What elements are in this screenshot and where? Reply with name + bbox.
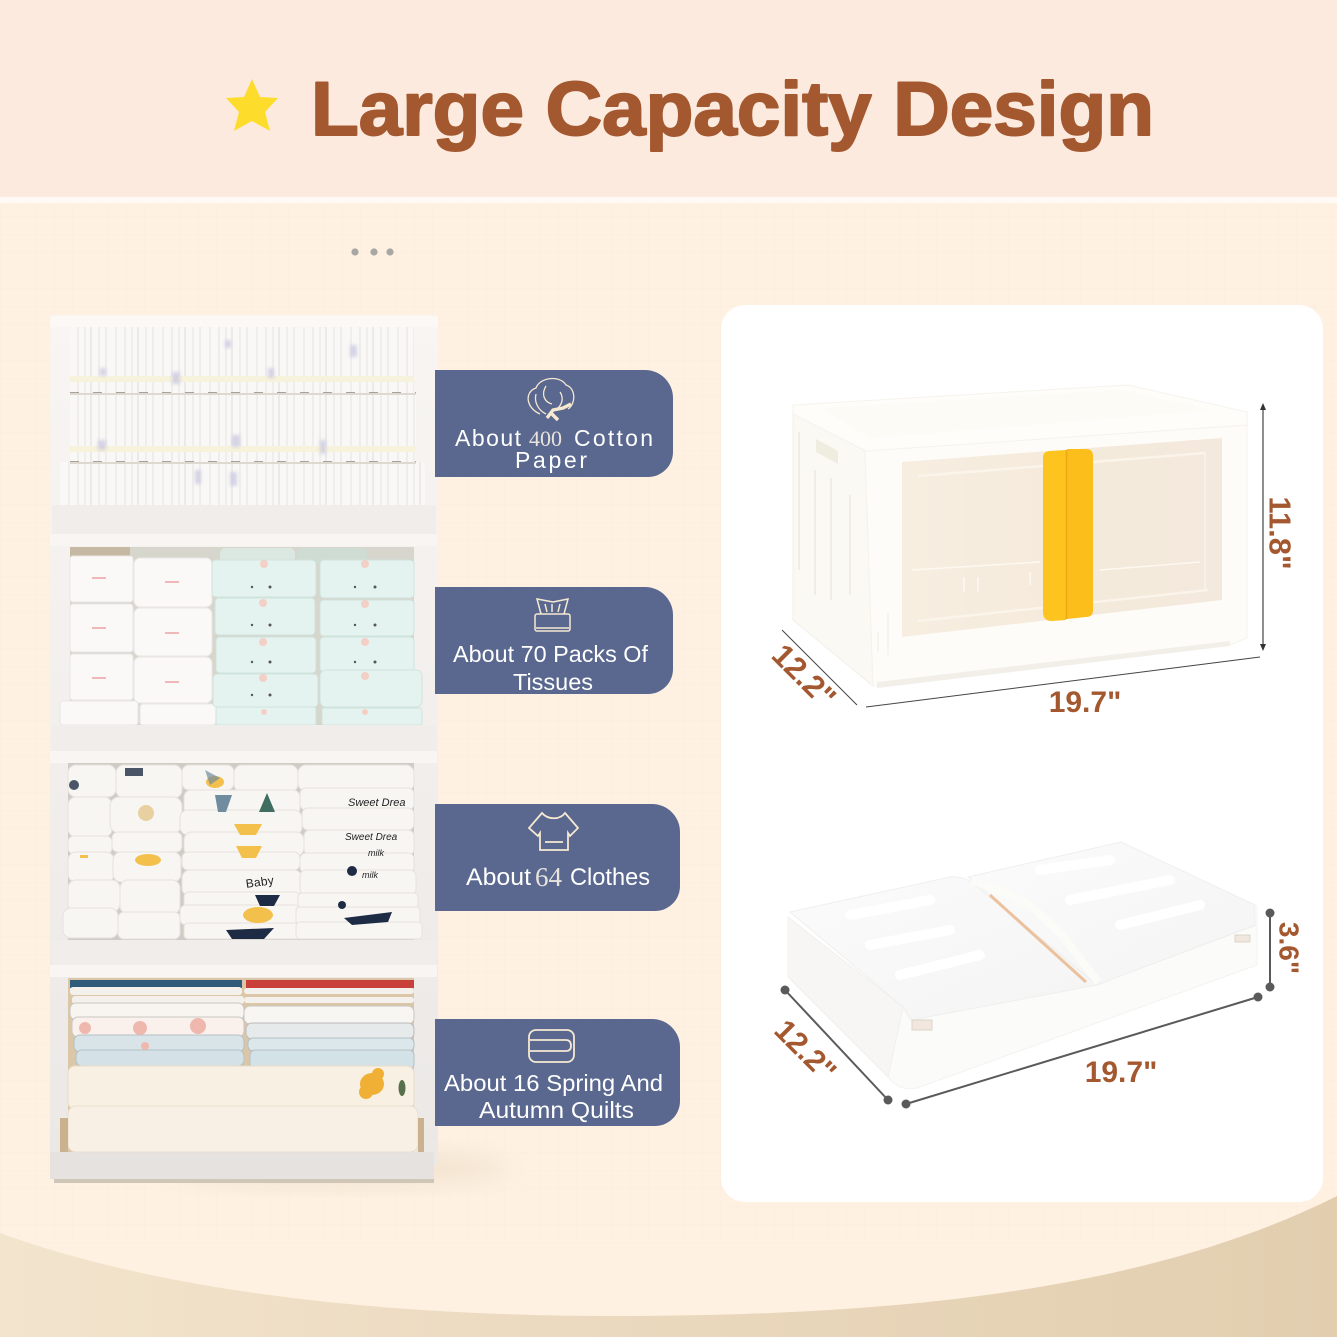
left lid panel — [790, 877, 1097, 1020]
front body — [888, 905, 1257, 1089]
compartment: diapers — [60, 327, 425, 506]
dimension: height 3.6 — [1266, 908, 1304, 992]
icon: folded quilt — [529, 1030, 574, 1062]
latches — [912, 935, 1250, 1030]
compartment: clothes: milk — [362, 870, 378, 880]
panel: stacked storage unit — [50, 315, 510, 1186]
dimension: width 19.7: 19.7" — [1049, 686, 1121, 719]
panel: cotton paper callout — [435, 370, 673, 477]
label: Autumn Quilts — [479, 1097, 634, 1123]
label: About — [455, 425, 522, 451]
lid — [793, 385, 1247, 451]
quilt bottom — [68, 1106, 418, 1152]
hinge seam — [990, 895, 1086, 982]
label: Tissues — [513, 669, 593, 695]
compartment: clothes — [63, 763, 422, 940]
unit body — [50, 315, 438, 1166]
compartment: tissues — [60, 547, 422, 725]
shelf lip 1 — [52, 505, 436, 534]
dimension: depth 12.2 — [768, 986, 892, 1104]
door window — [902, 438, 1222, 637]
left opening — [788, 917, 903, 1077]
icon: tissue box — [535, 599, 570, 631]
right lid panel — [968, 842, 1255, 985]
dimension: height 3.6: 3.6" — [1274, 922, 1304, 974]
dimension: width 19.7: 19.7" — [1085, 1056, 1157, 1089]
header band — [0, 0, 1337, 197]
compartment: clothes: Sweet Drea — [345, 832, 398, 843]
yellow handles — [1043, 450, 1066, 621]
label: About — [466, 864, 531, 891]
label: 400 — [529, 426, 562, 451]
compartment: quilts — [60, 978, 424, 1152]
title: Large Capacity Design — [311, 67, 1154, 152]
panel: quilts callout — [435, 1019, 680, 1126]
garment prints — [80, 776, 273, 923]
label: Clothes — [570, 864, 650, 891]
dimension: width 19.7 — [902, 992, 1262, 1108]
dimension: height 11.8: 11.8" — [1262, 496, 1298, 570]
box front — [865, 425, 1247, 686]
icon: t-shirt — [529, 813, 578, 850]
floor shadow — [170, 1150, 510, 1186]
product: folded box — [768, 842, 1304, 1108]
box side — [793, 408, 873, 686]
lid ribs — [850, 860, 1200, 975]
label: Paper — [515, 447, 587, 473]
label: 64 — [535, 862, 562, 892]
panel: clothes callout — [435, 804, 680, 911]
header divider — [0, 197, 1337, 203]
icon: cotton — [528, 379, 574, 420]
dimension: depth 12.2: 12.2" — [768, 1014, 842, 1088]
label: About 70 Packs Of — [453, 641, 649, 667]
label: About 16 Spring And — [444, 1070, 663, 1096]
shelf lip 2 — [52, 725, 436, 751]
panel: product dimensions — [721, 305, 1323, 1202]
compartment: clothes: milk — [368, 848, 384, 858]
panel: tissues callout — [435, 587, 673, 695]
dimension: height 11.8 — [1260, 403, 1298, 651]
dimension: depth 12.2: 12.2" — [765, 637, 843, 715]
label: Cotton — [574, 425, 653, 451]
compartment: clothes: Sweet Drea — [348, 797, 405, 809]
bottom ledge — [877, 641, 1230, 688]
shelf lip 3 — [52, 940, 436, 965]
icon: star — [226, 79, 278, 131]
dimension: width 19.7 — [866, 657, 1260, 719]
product: open box — [793, 385, 1247, 688]
pagination dots — [351, 248, 394, 256]
quilt top — [68, 1066, 414, 1109]
side handle — [816, 439, 838, 464]
compartment: clothes: Baby — [245, 873, 275, 891]
